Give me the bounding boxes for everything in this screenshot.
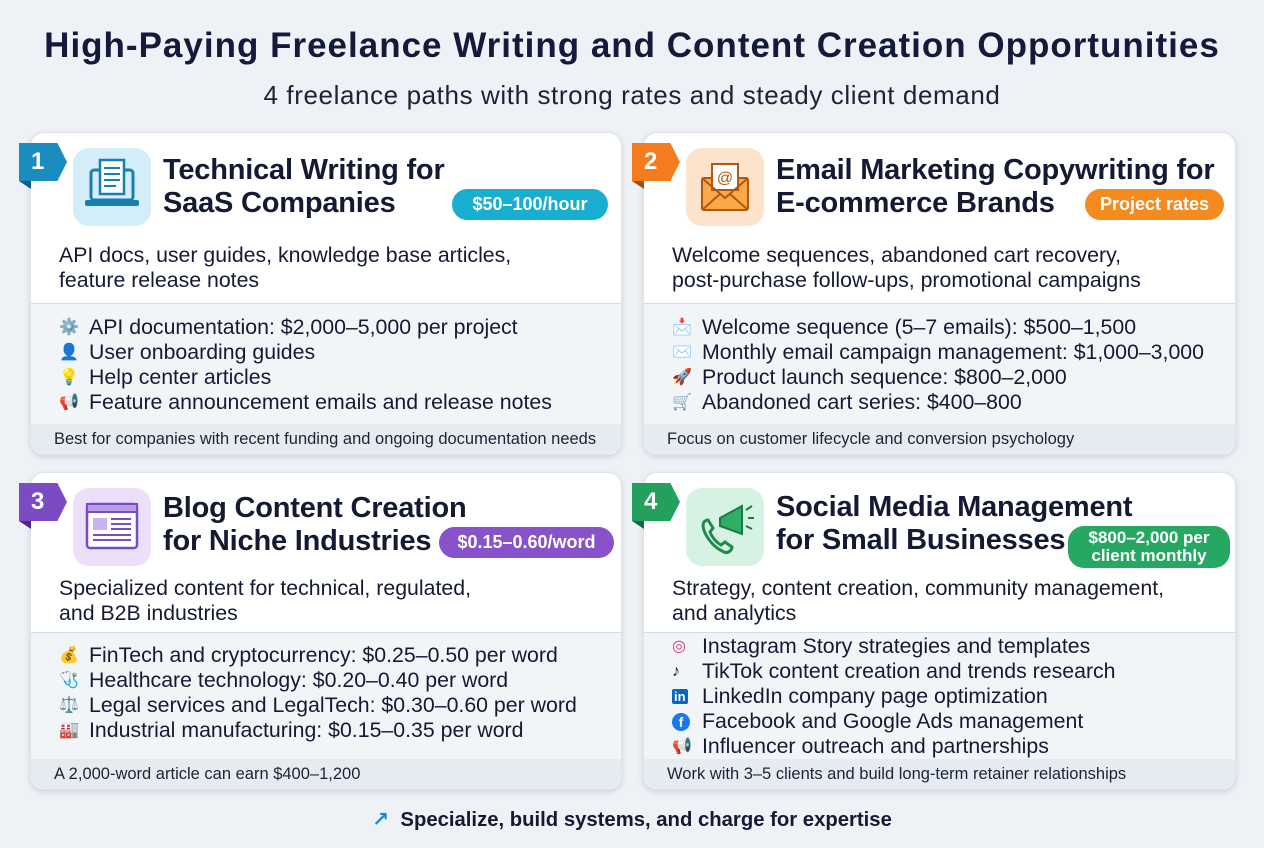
title: High-Paying Freelance Writing and Content Creation Opportunities <box>44 26 1220 65</box>
heading: Social Media Management <box>776 491 1132 523</box>
footer note: Focus on customer lifecycle and conversion psychology <box>667 430 1074 448</box>
footer tagline: ↗ Specialize, build systems, and charge for expertise <box>372 809 892 831</box>
bullets: Instagram Story strategies and templates <box>702 634 1090 658</box>
badge 1: 1 <box>31 148 44 175</box>
heading: Email Marketing Copywriting for <box>776 154 1215 186</box>
icon: laptop document <box>73 148 151 226</box>
rate pill: Project rates <box>1100 194 1209 214</box>
bullets <box>31 632 621 789</box>
description <box>672 243 1141 292</box>
badge 2: 2 <box>644 148 657 175</box>
description <box>59 576 471 625</box>
footer note <box>644 759 1235 789</box>
rate pill <box>1068 526 1230 568</box>
rate pill <box>439 527 614 558</box>
bullets: Legal services and LegalTech: $0.30–0.60 per word <box>89 693 577 717</box>
icon: envelope <box>686 148 764 226</box>
bullets: ⚙️ <box>59 319 79 336</box>
icon: phone megaphone <box>686 488 764 566</box>
footer note: Work with 3–5 clients and build long-term retainer relationships <box>667 765 1126 783</box>
bullets: f <box>679 714 683 730</box>
rate pill <box>452 189 608 220</box>
heading <box>776 491 1132 556</box>
bullets: API documentation: $2,000–5,000 per project <box>89 315 518 339</box>
bullets: Healthcare technology: $0.20–0.40 per word <box>89 668 508 692</box>
bullets: Welcome sequence (5–7 emails): $500–1,500 <box>702 315 1136 339</box>
heading <box>776 154 1215 219</box>
rate pill: client monthly <box>1091 546 1207 565</box>
heading: Blog Content Creation <box>163 492 467 524</box>
heading: E-commerce Brands <box>776 187 1055 219</box>
bullets: LinkedIn company page optimization <box>702 684 1048 708</box>
rate pill: $50–100/hour <box>472 194 588 214</box>
bullets: ⚖️ <box>59 697 79 714</box>
panel: technical writing <box>30 132 622 455</box>
heading: Technical Writing for <box>163 154 445 186</box>
bullets: Abandoned cart series: $400–800 <box>702 390 1022 414</box>
badge 2 <box>632 143 680 181</box>
icon: browser article <box>73 488 151 566</box>
bullets: 🛒 <box>672 394 692 411</box>
bullets: TikTok content creation and trends research <box>702 659 1116 683</box>
bullets: Facebook and Google Ads management <box>702 709 1083 733</box>
bullets: ✉️ <box>672 344 692 361</box>
description: API docs, user guides, knowledge base articles, <box>59 243 511 267</box>
bullets: 📢 <box>59 394 79 411</box>
panel: email marketing <box>643 132 1236 455</box>
subtitle: 4 freelance paths with strong rates and steady client demand <box>264 80 1000 110</box>
bullets: 💡 <box>59 369 79 386</box>
icon: envelope: @ <box>717 170 733 187</box>
bullets <box>31 303 621 454</box>
description: feature release notes <box>59 268 259 292</box>
bullets: 🩺 <box>59 672 79 689</box>
heading <box>163 154 445 219</box>
rate pill: $800–2,000 per <box>1088 528 1210 547</box>
heading: for Small Businesses <box>776 524 1065 556</box>
panel: social media <box>643 472 1236 790</box>
footer note <box>31 424 621 454</box>
footer note <box>31 759 621 789</box>
bullets: Product launch sequence: $800–2,000 <box>702 365 1067 389</box>
bullets: Monthly email campaign management: $1,000–3,000 <box>702 340 1204 364</box>
badge 3: 3 <box>31 488 44 515</box>
badge 1 <box>19 143 67 181</box>
bullets: User onboarding guides <box>89 340 315 364</box>
bullets: 🚀 <box>672 369 692 386</box>
badge 4 <box>632 483 680 521</box>
description: Welcome sequences, abandoned cart recovery, <box>672 243 1121 267</box>
description: Specialized content for technical, regulated, <box>59 576 471 600</box>
bullets: ♪ <box>672 663 680 680</box>
bullets: 💰 <box>59 647 79 664</box>
rate pill <box>1085 189 1224 220</box>
bullets <box>644 632 1235 789</box>
bullets: Industrial manufacturing: $0.15–0.35 per word <box>89 718 524 742</box>
description: and B2B industries <box>59 601 238 625</box>
description: and analytics <box>672 601 796 625</box>
heading: SaaS Companies <box>163 187 396 219</box>
description <box>672 576 1164 625</box>
panel: blog content <box>30 472 622 790</box>
bullets: 📢 <box>672 738 692 755</box>
heading: for Niche Industries <box>163 525 431 557</box>
bullets: Feature announcement emails and release notes <box>89 390 552 414</box>
bullets: in <box>674 689 686 704</box>
badge 3 <box>19 483 67 521</box>
bullets: Influencer outreach and partnerships <box>702 734 1049 758</box>
bullets <box>644 303 1235 454</box>
bullets: 📩 <box>672 319 692 336</box>
bullets: FinTech and cryptocurrency: $0.25–0.50 per word <box>89 643 558 667</box>
bullets: 👤 <box>59 344 79 361</box>
footer note: A 2,000-word article can earn $400–1,200 <box>54 765 360 783</box>
footer note <box>644 424 1235 454</box>
bullets: ◎ <box>672 638 686 655</box>
footer note: Best for companies with recent funding and ongoing documentation needs <box>54 430 596 448</box>
badge 4: 4 <box>644 488 657 515</box>
heading <box>163 492 467 557</box>
bullets: Help center articles <box>89 365 271 389</box>
description: post-purchase follow-ups, promotional campaigns <box>672 268 1141 292</box>
description <box>59 243 511 292</box>
rate pill: $0.15–0.60/word <box>457 532 596 552</box>
description: Strategy, content creation, community management, <box>672 576 1164 600</box>
bullets: 🏭 <box>59 722 79 739</box>
